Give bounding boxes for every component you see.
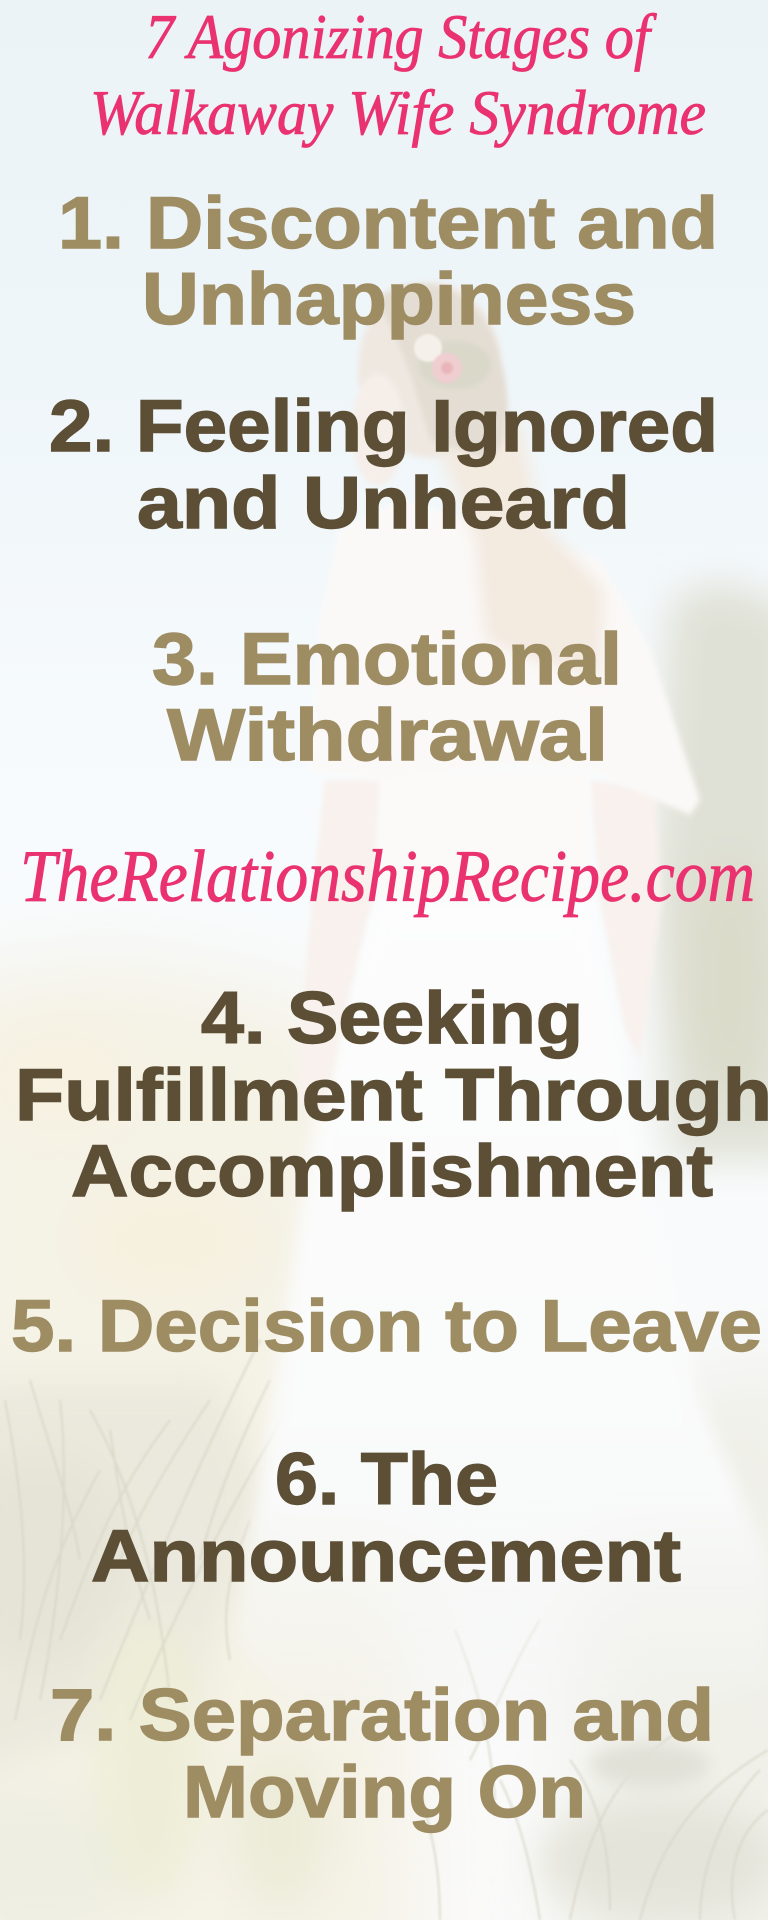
head and hair [352,282,508,486]
long hair [435,420,605,680]
stage 3: 3. Emotional [152,619,622,700]
stage 2: 2. Feeling Ignored [49,386,718,467]
stage 1 [58,183,718,340]
stage 6: 6. The [275,1439,498,1520]
stage 7 [50,1675,714,1833]
blurred foreground flowers [0,1020,768,1920]
title: Walkaway Wife Syndrome [90,78,706,148]
stage 3 [152,619,622,776]
stage 7: Moving On [183,1752,586,1833]
title [90,2,706,148]
stage 4: Accomplishment [71,1131,713,1212]
stage 2: and Unheard [137,463,630,544]
stage 4: 4. Seeking [201,978,583,1059]
stage 4: Fulfillment Through [15,1055,768,1136]
stage 6: Announcement [91,1516,681,1597]
stage 2 [49,386,718,544]
stage 1: 1. Discontent and [58,183,718,264]
left grass mass [0,1380,270,1920]
dark patch in lower right grass [590,1743,710,1787]
arms [298,780,662,1110]
tree on the right [650,580,768,1160]
skirt of the dress [235,900,768,1740]
stage 1: Unhappiness [142,259,636,340]
bodice [375,770,590,900]
sleeves and shoulders [310,500,700,815]
stage 5: 5. Decision to Leave [11,1286,762,1367]
stage 4 [15,978,768,1212]
stage 6 [91,1439,681,1597]
title: 7 Agonizing Stages of [145,2,657,72]
flowers in hair [414,334,462,383]
stage 7: 7. Separation and [50,1675,714,1756]
grass blades [5,1340,768,1920]
meadow ground [0,955,768,1920]
stage 3: Withdrawal [167,695,608,776]
